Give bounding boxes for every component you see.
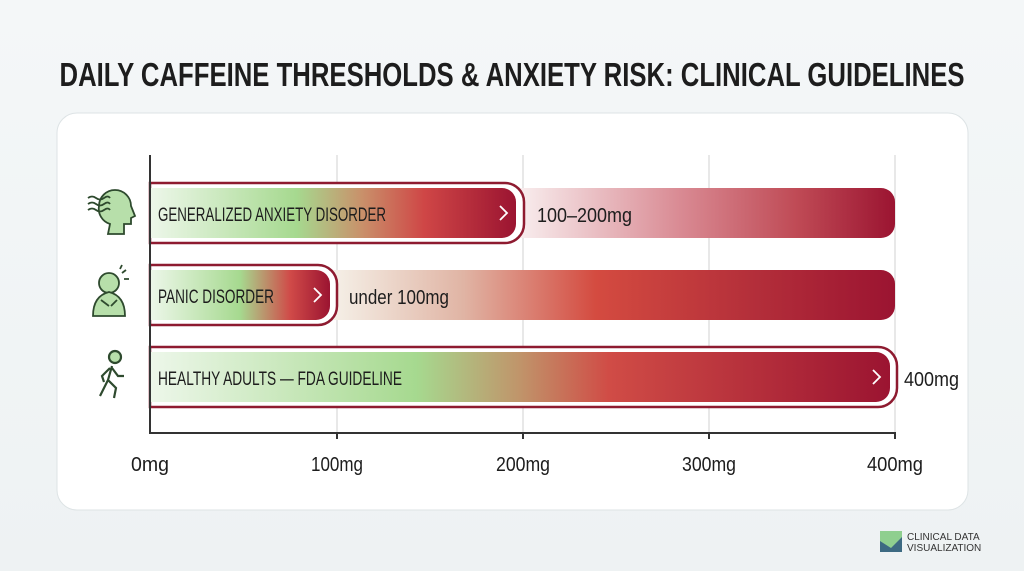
axis tick labels: 200mg bbox=[496, 454, 550, 476]
grid lines bbox=[337, 155, 895, 432]
bar: GAD background range bbox=[505, 188, 895, 238]
bar: GAD bbox=[150, 183, 632, 243]
panel: chart card bbox=[57, 113, 968, 510]
bar: panic disorder: under 100mg bbox=[349, 287, 449, 309]
axis tick labels: 400mg bbox=[867, 454, 923, 476]
bar: panic background range bbox=[320, 270, 895, 320]
bar: healthy adults: HEALTHY ADULTS — FDA GUIDELINE bbox=[158, 369, 402, 390]
axis tick labels: 0mg bbox=[131, 454, 169, 476]
bar: GAD: 100–200mg bbox=[537, 205, 632, 227]
axes bbox=[150, 155, 896, 439]
axis tick labels: 100mg bbox=[311, 454, 363, 476]
bar: healthy adults bbox=[150, 347, 959, 407]
logo: clinical data visualization bbox=[880, 531, 981, 554]
icon: walking person bbox=[100, 351, 124, 398]
bar: GAD: GENERALIZED ANXIETY DISORDER bbox=[158, 205, 386, 226]
logo: clinical data visualization: CLINICAL DATA bbox=[907, 532, 980, 543]
bar: panic disorder bbox=[150, 265, 449, 325]
axis tick labels bbox=[131, 454, 923, 476]
bar chart bbox=[150, 183, 959, 407]
icon: head with waves bbox=[88, 190, 135, 234]
axis tick labels: 300mg bbox=[682, 454, 736, 476]
bar: panic disorder: PANIC DISORDER bbox=[158, 287, 274, 308]
bar: healthy adults: 400mg bbox=[904, 369, 959, 391]
icon: person with chest pain bbox=[93, 265, 129, 316]
logo: clinical data visualization: VISUALIZATION bbox=[907, 543, 981, 554]
